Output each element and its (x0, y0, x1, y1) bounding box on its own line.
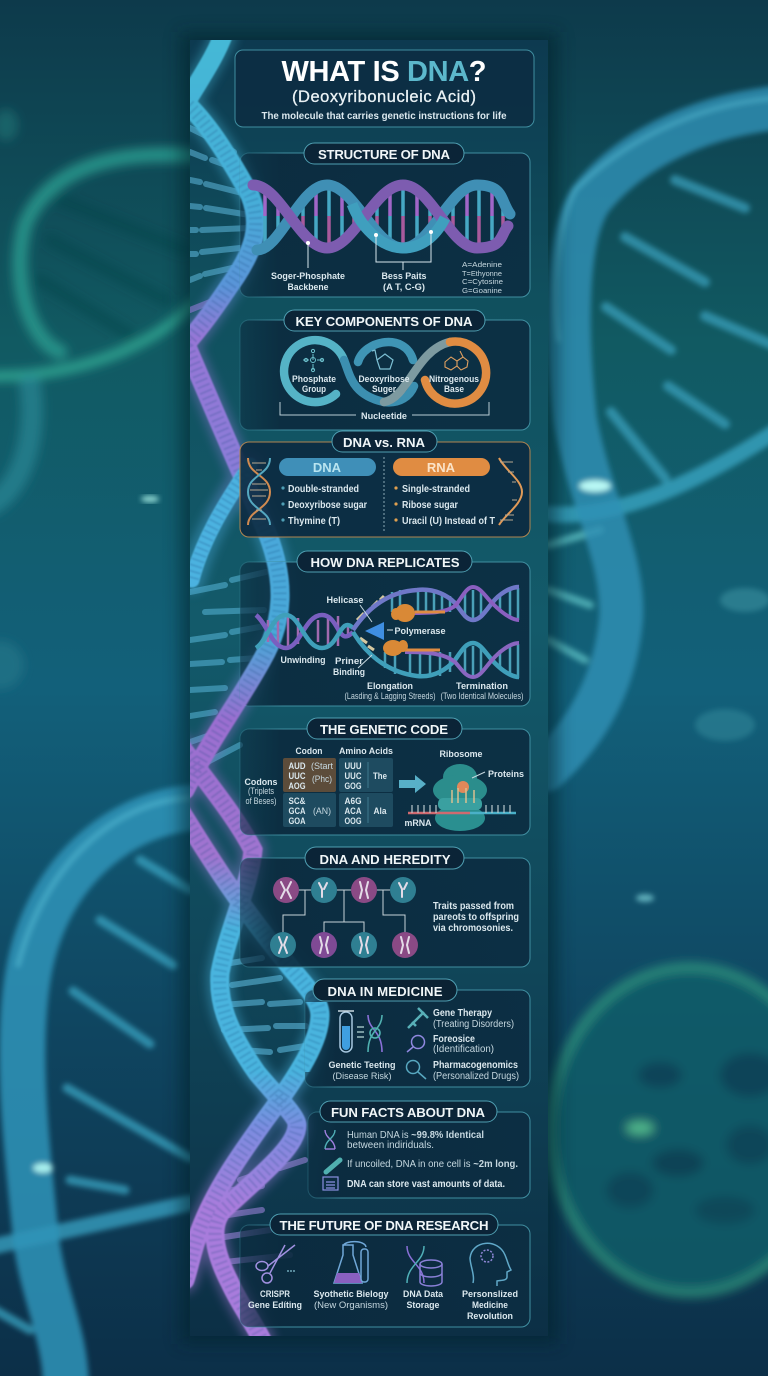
label: helicase: Helicase (326, 595, 364, 606)
label: primer binding: Binding (333, 667, 365, 678)
label: elongation: (Lasding & Lagging Streeds) (344, 691, 436, 702)
heading (320, 1101, 497, 1122)
fact 1: Human DNA is ~99.8% Identical (347, 1130, 484, 1141)
base legend: G=Goanine (462, 286, 502, 295)
label: base pairs: (A T, C-G) (383, 282, 425, 293)
ring labels: Suger (372, 384, 396, 395)
list: applications (433, 1008, 519, 1082)
fact 2: If uncoiled, DNA in one cell is ~2m long. (347, 1159, 518, 1170)
ring labels: Phosphate (292, 374, 336, 385)
label: genetic testing: (Disease Risk) (332, 1071, 392, 1082)
amino acid table (339, 746, 393, 827)
base legend: C=Cytosine (462, 277, 503, 286)
label: data storage: DNA Data (403, 1289, 444, 1300)
text: traits: pareots to offspring (433, 912, 519, 923)
label: backbone: Backbene (288, 282, 328, 293)
icon: test tube (338, 1011, 354, 1052)
panel: future (240, 1214, 530, 1327)
icon: DNA (325, 1130, 335, 1149)
amino acid table: Amino Acids (339, 746, 393, 757)
label: polymerase: Polymerase (394, 626, 446, 637)
icon: drug magnifier (406, 1060, 426, 1079)
ring labels: Group (302, 384, 326, 395)
panel: medicine (304, 978, 530, 1088)
label: data storage (403, 1289, 444, 1311)
codon table: GCA (288, 806, 306, 817)
list: applications: (Identification) (433, 1044, 494, 1055)
fact 1 (347, 1130, 484, 1151)
amino acid table: UUC (344, 771, 362, 782)
panel: key components (240, 310, 530, 430)
panel: DNA vs RNA (240, 431, 530, 537)
linked rings (284, 340, 486, 404)
helix rungs (190, 128, 306, 1262)
glow spot (141, 496, 159, 502)
label: synthetic biology: (New Organisms) (314, 1300, 388, 1311)
panel: structure of DNA (240, 142, 530, 298)
heading: STRUCTURE OF DNA (318, 147, 450, 162)
codon table: GOA (288, 816, 306, 827)
label: elongation: Elongation (367, 681, 413, 692)
base legend (462, 260, 503, 295)
nucleotide bracket (280, 402, 489, 422)
label: genetic testing: Genetic Teeting (328, 1060, 396, 1071)
text: traits: via chromosonies. (433, 923, 513, 934)
codon table: UUC (288, 771, 306, 782)
heading: HOW DNA REPLICATES (310, 555, 460, 570)
label: primer binding (333, 656, 365, 678)
helix right (545, 98, 768, 902)
icon: phosphate (303, 349, 324, 372)
codon table: AUD (288, 761, 306, 772)
icon: DNA (368, 1015, 382, 1052)
icon: scissors (256, 1245, 296, 1283)
leader lines (358, 605, 372, 668)
label: termination: Termination (456, 681, 508, 692)
ribosome labels: Proteins (488, 769, 524, 780)
panel: how DNA replicates (240, 550, 530, 706)
label: CRISPR: CRISPR (260, 1289, 290, 1300)
icon: syringe (408, 1008, 428, 1028)
heading: THE GENETIC CODE (320, 722, 448, 737)
strand glow (190, 40, 324, 1336)
label: elongation (344, 681, 436, 702)
subtitle: (Deoxyribonucleic Acid) (292, 88, 476, 106)
blurred helix top left (0, 109, 195, 689)
base legend: T=Ethyonne (462, 269, 502, 278)
codon table: AOG (288, 781, 306, 792)
label: backbone: Soger-Phosphate (271, 271, 345, 282)
list: applications: (Personalized Drugs) (433, 1071, 519, 1082)
fact 1: between indiriduals. (347, 1140, 434, 1151)
heading: KEY COMPONENTS OF DNA (296, 314, 473, 329)
label: base pairs (382, 271, 426, 293)
list: applications: Foreosice (433, 1034, 475, 1045)
icon: document (323, 1177, 338, 1190)
ring labels (292, 374, 479, 395)
DNA column: DNA (313, 460, 342, 475)
icon: chain (326, 1160, 340, 1172)
label: base pairs: Bess Paits (382, 271, 426, 282)
nucleotide bracket: Nucleetide (361, 411, 407, 422)
base legend: A=Adenine (462, 260, 502, 269)
codon table: Codon (296, 746, 323, 757)
amino acid table: GOG (344, 781, 362, 792)
heading: DNA AND HEREDITY (320, 852, 451, 867)
label: personalized medicine (462, 1289, 518, 1322)
helix lower left (0, 798, 190, 1376)
heading: FUN FACTS ABOUT DNA (331, 1105, 485, 1120)
RNA column: Ribose sugar (402, 500, 458, 511)
polymerase blobs (383, 604, 415, 656)
label: CRISPR: Gene Edíting (248, 1300, 302, 1311)
RNA column: Single-stranded (402, 484, 470, 495)
label: synthetic biology: Syothetic Bielogy (314, 1289, 389, 1300)
fact 3: DNA can store vast amounts of data. (347, 1179, 505, 1190)
title panel (235, 50, 534, 127)
label: unwinding: Unwinding (280, 655, 326, 666)
label: synthetic biology (314, 1289, 389, 1311)
label: data storage: Storage (406, 1300, 440, 1311)
ribosome labels (404, 749, 524, 829)
arrow: helicase wedge (365, 622, 393, 640)
list: applications: (Treating Disorders) (433, 1019, 514, 1030)
double helix diagram (253, 184, 510, 270)
label: termination: (Two Identical Molecules) (440, 691, 524, 702)
codons label: (Triplets (248, 786, 274, 797)
icon: equals lines (357, 1027, 364, 1037)
amino acid table: UUU (344, 761, 362, 772)
replication fork diagram (256, 587, 519, 678)
label: personalized medicine: Medicine (472, 1300, 508, 1311)
icon: flask (334, 1242, 368, 1283)
amino acid table: ACA (344, 806, 362, 817)
panel: heredity (240, 847, 530, 967)
pedigree lines (283, 890, 405, 932)
heading: DNA IN MEDICINE (328, 984, 443, 999)
codon table (283, 746, 336, 827)
codon table: (Phc) (312, 774, 332, 785)
list: applications: Gene Therapy (433, 1008, 492, 1019)
heading (332, 431, 437, 452)
heading: THE FUTURE OF DNA RESEARCH (280, 1218, 488, 1233)
ribosome (408, 764, 516, 831)
codon table: (AN) (313, 806, 331, 817)
heading (304, 143, 464, 164)
icon: sugar ring (372, 350, 393, 369)
DNA column: Double-stranded (288, 484, 359, 495)
text: traits (433, 901, 519, 934)
list: applications: Pharmacogenomics (433, 1060, 518, 1071)
amino acid table: A6G (344, 796, 362, 807)
codons label (244, 777, 278, 807)
label: genetic testing (328, 1060, 396, 1082)
heading (307, 718, 462, 739)
RNA column (393, 458, 495, 527)
helix passing over panel (240, 562, 290, 706)
panel: fun facts (308, 1101, 530, 1198)
ring labels: Base (444, 384, 464, 395)
main panel (180, 32, 558, 1344)
divider (383, 457, 385, 532)
icon: base rings (445, 351, 468, 370)
amino acid table: The (373, 771, 387, 782)
amino acid table: Ala (374, 806, 387, 817)
codons label: Codons (244, 777, 278, 788)
ribosome labels: mRNA (404, 818, 432, 829)
icon: DNA helix (248, 458, 270, 525)
RNA column: Uracil (U) Instead of T (402, 516, 495, 527)
icon: DNA and database (407, 1246, 442, 1286)
tagline: The molecule that carries genetic instructions for life (262, 110, 507, 122)
strands (170, 30, 320, 1340)
heading (270, 1214, 498, 1235)
codon table: (Start (311, 761, 333, 772)
large side helix (170, 30, 320, 1340)
panel: genetic code (240, 718, 530, 835)
heading: DNA vs. RNA (343, 435, 425, 450)
ring labels: Deoxyribose (358, 374, 410, 385)
helix passing over panel (240, 158, 264, 288)
codons label: of Beses) (246, 796, 276, 807)
ribosome labels: Ribosome (440, 749, 482, 760)
heading (313, 979, 457, 1001)
heading (305, 847, 464, 869)
codon table: SC& (288, 796, 306, 807)
heading (284, 310, 485, 331)
amino acid table: OOG (344, 816, 362, 827)
label: personalized medicine: Revolution (467, 1311, 513, 1322)
heading (297, 551, 472, 572)
DNA column: Deoxyribose sugar (288, 500, 367, 511)
icon: head (470, 1243, 511, 1286)
label: personalized medicine: Personslized (462, 1289, 518, 1300)
label: termination (440, 681, 524, 702)
title: WHAT IS DNA? (282, 56, 486, 88)
label: CRISPR (248, 1289, 302, 1311)
RNA column: RNA (427, 460, 456, 475)
text: traits: Traits passed from (433, 901, 514, 912)
label: backbone (271, 271, 345, 293)
icon: RNA strand (499, 458, 522, 525)
icon: magnifier (407, 1036, 424, 1052)
helix passing over panel edge (305, 1002, 330, 1072)
label: primer binding: Priner (335, 656, 363, 667)
DNA column (279, 458, 376, 527)
chromosome circles (270, 877, 418, 958)
arrow (399, 775, 426, 793)
ring labels: Nitrogenous (429, 374, 479, 385)
DNA column: Thymine (T) (288, 516, 340, 527)
blurred cell (550, 967, 768, 1293)
